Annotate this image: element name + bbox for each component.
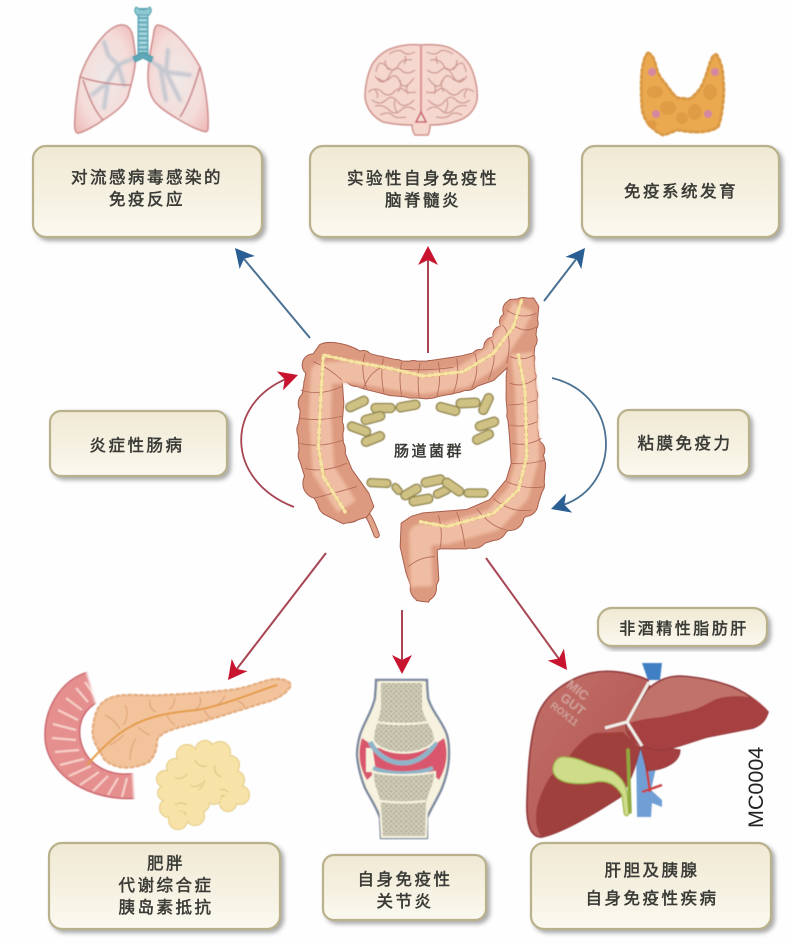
label: gut microbiota: 肠道菌群 [394, 443, 464, 460]
gut vessels [636, 745, 662, 817]
panel: hepatobiliary and pancreatic autoimmune disease: 自身免疫性疾病 [586, 889, 718, 908]
arrow: to pancreas [220, 553, 326, 686]
panel: mucosal immunity [618, 410, 749, 476]
illustration: colon [297, 298, 545, 602]
bacteria cluster: bottom [367, 474, 488, 507]
panel: inflammatory bowel disease [50, 411, 227, 476]
panel: obesity metabolic syndrome: 代谢综合症 [118, 876, 214, 895]
icon: brain [365, 45, 477, 135]
haustra folds [299, 310, 545, 567]
bacteria cluster: upper left [344, 395, 421, 448]
panel: autoimmune arthritis: 关节炎 [376, 892, 434, 911]
bacteria cluster: upper right [435, 392, 500, 446]
right lobe [527, 671, 652, 837]
panel: non-alcoholic fatty liver: 非酒精性脂肪肝 [619, 620, 749, 638]
arrow: to joint [392, 610, 412, 674]
duodenum faded ends [85, 664, 150, 804]
arrow: to liver [486, 558, 575, 676]
appendix [362, 510, 377, 535]
panel: autoimmune arthritis: 自身免疫性 [358, 870, 452, 889]
icon: lungs [75, 7, 208, 133]
hepatic vein [642, 663, 662, 680]
duodenum [45, 672, 140, 799]
caudate lobe [640, 745, 680, 771]
gallbladder [553, 757, 629, 816]
icon: joint [357, 680, 449, 838]
panel: immune system development [582, 146, 779, 237]
panel: influenza immune response [33, 146, 262, 237]
liver watermark: ROX11 [548, 700, 580, 729]
fat tissue [157, 741, 249, 829]
panel: influenza immune response: 对流感病毒感染的 [71, 168, 223, 187]
panel: obesity metabolic syndrome: 胰岛素抵抗 [118, 898, 214, 917]
arrow: to influenza response [227, 242, 310, 338]
panel: autoimmune encephalomyelitis: 脑脊髓炎 [385, 191, 461, 210]
arrow: curved blue from colon [548, 378, 606, 519]
icon: liver [527, 663, 768, 837]
icon: duodenum, pancreas and fat [45, 664, 290, 829]
liver watermark [548, 677, 599, 729]
panel: autoimmune arthritis [323, 855, 486, 920]
panel: inflammatory bowel disease: 炎症性肠病 [90, 436, 184, 455]
label: MC0004 code: MC0004 [744, 747, 768, 828]
arrow: to encephalomyelitis [418, 246, 438, 353]
panel: mucosal immunity: 粘膜免疫力 [638, 434, 732, 453]
panel: hepatobiliary and pancreatic autoimmune disease [531, 843, 771, 929]
panel: immune system development: 免疫系统发育 [624, 182, 738, 201]
panel: autoimmune encephalomyelitis [310, 146, 529, 237]
pancreas [93, 679, 290, 768]
panel: influenza immune response: 免疫反应 [109, 190, 185, 209]
left lobe [626, 676, 768, 750]
lumen [318, 300, 527, 527]
arrow: curved red to colon [241, 365, 301, 507]
panel: non-alcoholic fatty liver [598, 608, 767, 646]
arrow: to immune development [544, 242, 593, 301]
panel: obesity metabolic syndrome: 肥胖 [147, 854, 185, 873]
liver watermark: GUT [558, 690, 588, 718]
icon: thyroid [641, 53, 724, 135]
panel: obesity metabolic syndrome [49, 843, 280, 929]
ligament [605, 682, 649, 746]
panel: autoimmune encephalomyelitis: 实验性自身免疫性 [347, 169, 499, 188]
panel: hepatobiliary and pancreatic autoimmune disease: 肝胆及胰腺 [604, 861, 700, 880]
liver watermark: MIC [564, 677, 592, 704]
